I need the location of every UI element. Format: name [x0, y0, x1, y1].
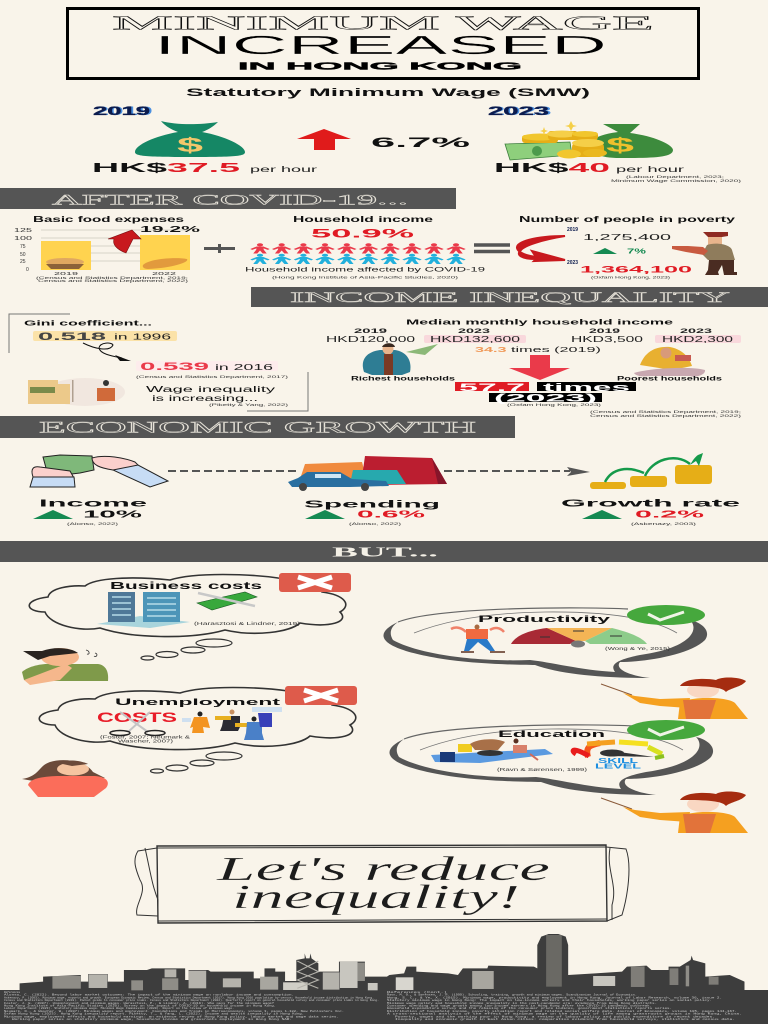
panel: gini coefficient: (Piketty & Yang, 2022) — [209, 403, 288, 407]
gini 1996 value — [33, 331, 177, 343]
panel: business costs thought: Business costs — [110, 581, 263, 592]
panel: 2019 wage: HK$ 37.5 — [92, 160, 240, 175]
text block: references — [4, 990, 742, 1021]
icon: green tick — [627, 720, 705, 740]
gini 1996 value: 0.518 — [38, 331, 106, 343]
panel: basic food expenses: 19.2% — [140, 225, 200, 234]
section heading: after COVID-19 — [0, 188, 456, 209]
panel: productivity speech — [383, 605, 748, 719]
panel: people in poverty: 7% — [627, 248, 647, 256]
icon: teacher pointing — [601, 677, 748, 719]
icon: office buildings — [97, 592, 190, 628]
icon: money bag 2019: $ — [177, 135, 203, 157]
panel: income growth — [30, 455, 168, 526]
skyline footer — [0, 934, 768, 1024]
panel: people in poverty — [517, 215, 737, 280]
bar chart: food expenses: 2019 — [54, 271, 79, 276]
icon: poor woman — [634, 347, 705, 377]
icon: money bag 2019 — [135, 121, 245, 157]
panel: 2019 wage: 2019 — [94, 104, 153, 118]
icon: people and coin stacks — [28, 378, 125, 406]
arrow: poverty growth — [517, 236, 565, 261]
gini 2016 value — [136, 361, 278, 373]
text block: references: Alonso, C. (2022). Beyond labor market outcomes: The impact of the minimum wage on nonlabor income and consumption. — [4, 993, 294, 997]
panel: 2023 wage: per hour — [616, 165, 685, 174]
panel: 2023 wage: 2023 — [490, 104, 552, 118]
text block: references: Working paper series on statutory minimum wage, household income and grassroots employment in Hong Kong SAR. — [12, 1017, 292, 1021]
section heading: economic growth: ECONOMIC GROWTH — [39, 420, 476, 436]
panel: unemployment thought: Wascher, 2007) — [118, 738, 174, 744]
panel: household income: Household income — [293, 215, 434, 224]
icon: red cross tag — [285, 686, 357, 705]
panel: 2019 wage — [92, 104, 318, 175]
panel: people in poverty: 2023 — [567, 260, 578, 266]
icon: thinking woman — [22, 760, 108, 797]
icon: green up triangle — [593, 248, 617, 254]
panel: people in poverty: 2019 — [567, 227, 578, 233]
panel: education speech: Education — [498, 729, 605, 740]
callout: 57.7 times: times — [543, 382, 630, 394]
icon row: households blue — [250, 254, 466, 264]
icon: money pile 2023 — [505, 121, 673, 160]
icon: bread basket — [46, 258, 84, 269]
icon: hands with money — [30, 455, 168, 487]
panel: median monthly household income: HKD120,000 — [326, 335, 416, 344]
panel: median monthly household income: Richest households — [351, 376, 456, 382]
icon: plus sign — [204, 244, 235, 253]
text block: references: Poverty, wages and the working poor in Hong Kong: a review of labour policy and public expenditure in recent decades. — [395, 1014, 715, 1018]
panel: 2019 wage: per hour — [250, 165, 318, 174]
text block: references: References — [4, 990, 21, 994]
panel: income growth: Income — [39, 498, 148, 510]
section heading: income inequality: INCOME INEQUALITY — [290, 290, 732, 306]
callout: 57.7 times: 57.7 — [459, 382, 525, 394]
panel: unemployment thought: Unemployment — [115, 697, 282, 708]
icon: shopping bags and car — [288, 456, 447, 491]
increase percentage: 6.7% — [371, 134, 472, 150]
icon: teacher pointing — [601, 791, 748, 833]
panel: household income: (Hong Kong Institute of Asia-Pacific Studies, 2020) — [272, 276, 458, 280]
panel: 2023 wage: 2023 — [488, 104, 550, 118]
icon: up triangle spending — [305, 510, 345, 519]
gauge: skill level: SKILL — [598, 758, 639, 765]
panel: spending growth — [288, 456, 447, 526]
call to action banner — [135, 845, 629, 923]
gini 2016 value: in 2016 — [215, 363, 274, 372]
speech bubble — [383, 608, 707, 678]
section heading: but — [0, 541, 768, 562]
gini 1996 value: in 1996 — [114, 332, 172, 342]
icon: up triangle growth — [582, 510, 622, 519]
panel: median monthly household income: 2023 — [458, 329, 492, 335]
panel: gini coefficient: (Census and Statistics Department, 2017) — [136, 375, 288, 379]
text block: references: Consumer spending and wage growth among low-income earners in Hong Kong after the COVID-19 pandemic outbreak. — [387, 1004, 652, 1008]
gauge: skill level — [573, 742, 664, 770]
text block: references: Inequality and economic growth in East Asian cities: comparative evidence from household surveys, statistics and census data. — [395, 1017, 735, 1021]
icon: thinking man — [22, 648, 108, 685]
icon: baguette — [143, 258, 187, 269]
gauge: skill level: LEVEL — [595, 764, 642, 770]
icon: green tick — [627, 605, 705, 625]
panel: growth rate: Growth rate — [561, 498, 741, 510]
icon: money pile 2023: $ — [606, 135, 634, 157]
thought bubbles — [141, 639, 232, 660]
text block: references: Minimum wage policy and household income inequality in the post-pandemic era: evidence from Hong Kong districts. — [387, 1001, 657, 1005]
gauge: productivity faces — [511, 628, 647, 648]
title block: IN HONG KONG — [238, 62, 523, 72]
panel: income growth: (Alonso, 2022) — [67, 522, 118, 526]
panel: median monthly household income: HKD2,300 — [662, 335, 734, 344]
panel: median monthly household income: Median monthly household income — [406, 318, 673, 326]
arrow: wage increase — [297, 129, 351, 150]
panel: business costs thought: (Harasztosi & Lindner, 2019) — [194, 621, 301, 626]
arrow: spending to growth — [444, 467, 590, 476]
panel: median monthly household income: 34.3 times (2019) — [475, 347, 601, 354]
panel: median monthly household income: HKD132,600 — [430, 335, 521, 344]
citation: wage sources: (Labour Department, 2023; — [626, 175, 724, 179]
text block: references: Household expenditure survey and the rebasing of the consumer price indices, government statistical reports series. — [387, 1006, 672, 1010]
panel: median monthly household income — [326, 318, 741, 418]
panel: basic food expenses: Census and Statistics Department, 2022) — [38, 279, 188, 283]
panel: median monthly household income: 2023 — [680, 329, 714, 335]
arrow: income to spending — [168, 470, 300, 472]
panel: people in poverty: 1,275,400 — [583, 233, 672, 242]
panel: household income: 50.9% — [311, 226, 415, 240]
panel: unemployment thought: (Foster, 2007; Neumark & — [100, 734, 190, 740]
section heading: economic growth — [0, 416, 515, 438]
title block — [68, 8, 698, 78]
bar chart: food expenses: 75 — [20, 244, 26, 250]
bar chart: food expenses — [14, 228, 190, 276]
arrow: squiggle to 2016 — [83, 343, 131, 361]
citation: wage sources — [611, 175, 741, 183]
text block: references: Wong, S. C., & Ye, X. (2015). Minimum wage, productivity and employment in Hong Kong. Journal of Labor Research, volume 36, issue 2. — [387, 995, 722, 999]
gini 2016 value: 0.539 — [140, 361, 209, 373]
icon: up triangle income — [33, 510, 73, 519]
text block: references: Labour Department (2023). Statutory minimum wage. Minimum Wage Commission (2020). Report on the review of minimum wage. — [4, 1006, 234, 1010]
panel: median monthly household income: 2019 — [354, 329, 389, 335]
arrow: food expense rise — [108, 230, 141, 253]
text block: references: References (Cont.) — [387, 990, 448, 994]
panel: household income — [245, 215, 486, 280]
panel: 2023 wage: HK$ 40 — [494, 160, 610, 175]
panel: basic food expenses — [14, 215, 200, 283]
panel: spending growth: 0.6% — [357, 510, 425, 520]
text block: references: Askenazy, P. (2003). Minimum wage, exports and growth. European Economic Review. Census and Statistics Department (2017). Hong Kong 2016 population by-census: Household income distribution in Hong Kong. — [4, 995, 374, 999]
panel: productivity speech: Productivity — [478, 614, 612, 625]
bar chart: food expenses: 2022 — [152, 271, 177, 276]
citation: wage sources: Minimum Wage Commission, 2020) — [611, 179, 741, 183]
icon: red cross tag — [279, 573, 351, 592]
subtitle: statutory minimum wage: Statutory Minimum Wage (SMW) — [186, 87, 591, 99]
panel: gini coefficient: is increasing... — [152, 394, 258, 403]
text block: references: Distribution of household income, poverty situation report and related social welfare data. Journal of Economics, volume 105, pages 144-167. — [387, 1009, 737, 1013]
panel: household income: Household income affected by COVID-19 — [245, 268, 486, 274]
panel: education speech: (Ravn & Sørensen, 1999) — [497, 767, 588, 772]
title block: INCREASED — [154, 30, 607, 60]
icon row: affected households red — [250, 243, 466, 254]
call to action banner: inequality! — [232, 879, 520, 916]
panel: education speech — [389, 720, 748, 833]
text block: references: A cross-sectional analysis of the effect of minimum wage on the quality of life among grassroots groups in Hong Kong, China. — [387, 1012, 742, 1016]
thought cloud — [29, 574, 346, 637]
bar chart: food expenses: 25 — [20, 259, 26, 265]
bar chart: food expenses: 0 — [26, 267, 29, 273]
thought cloud — [39, 688, 356, 750]
hand drawn frame — [135, 845, 629, 923]
text block: references: Census and Statistics Department (2019). Pocket guide to consumer price index. Census and Statistics Department (2022). Quarterly report on general household survey and consumer price index in Hong Kong. — [4, 998, 379, 1002]
icon: money and scissors — [197, 592, 257, 610]
panel: growth rate — [561, 453, 741, 526]
panel: median monthly household income: Census and Statistics Department, 2022) — [590, 414, 741, 418]
icon: construction worker — [451, 624, 505, 652]
speech bubble — [389, 725, 713, 795]
section heading: after COVID-19: AFTER COVID-19... — [52, 192, 408, 208]
text block: references: Hong Kong Institute of Asia-Pacific Studies (2020). Survey on the impact of COVID-19 on household income in Hong Kong. — [4, 1004, 276, 1008]
text block: references: Neumark, D., & Wascher, W. (2007). Minimum wages and employment. Foundations and Trends in Microeconomics, volume 3, pages 1-182, Now Publishers Inc. — [4, 1009, 344, 1013]
thought bubbles — [150, 752, 242, 773]
panel: people in poverty: 1,364,100 — [580, 264, 692, 274]
bar chart: food expenses: 50 — [20, 252, 26, 258]
panel: gini coefficient: Gini coefficient... — [24, 318, 152, 328]
text block: references: Statutory minimum wage in Hong Kong: The impact on low-income workers and their households, working paper series on social policy. — [387, 998, 712, 1002]
section heading: but: BUT... — [332, 546, 438, 560]
panel: gini coefficient — [9, 314, 308, 411]
panel: median monthly household income: HKD3,500 — [571, 335, 644, 344]
panel: 2019 wage: 2019 — [93, 104, 151, 118]
panel: gini coefficient: Wage inequality — [146, 385, 275, 394]
icon: book with students — [431, 738, 553, 763]
icon: costs with scissors — [97, 709, 177, 736]
panel: people in poverty: (Oxfam Hong Kong, 2023) — [591, 276, 670, 280]
icon: coin stacks with arrow — [590, 453, 712, 489]
callout: 57.7 times: (2023) — [494, 392, 598, 404]
icon: costs with scissors: COSTS — [97, 709, 177, 725]
icon: man with bowl — [672, 232, 737, 275]
panel: unemployment thought — [22, 686, 357, 797]
bar chart: food expenses: 100 — [14, 236, 32, 242]
bar chart: food expenses: 125 — [14, 228, 32, 234]
panel: growth rate: (Askenazy, 2003) — [631, 522, 696, 526]
panel: productivity speech: (Wong & Ye, 2015) — [605, 646, 671, 651]
text block: references: Ravn, M. O., & Sørensen, J. R. (1999). Schooling, training, growth and minimum wages. Scandinavian Journal of Economics. — [387, 993, 637, 997]
panel: basic food expenses: Basic food expenses — [33, 215, 185, 224]
text block: references: Oxfam Hong Kong (2023). Hong Kong inequality report. Piketty, T., & Yang, L. (2022). Income and wealth inequality in Hong Kong. — [4, 1012, 304, 1016]
panel: 2023 wage — [488, 104, 685, 175]
callout: 57.7 times — [455, 382, 636, 404]
panel: median monthly household income: Poorest households — [617, 376, 723, 382]
text block: references: Foster, J. E. (2007). Unemployment and minimum wages. Harasztosi, P., & Lindner, A. (2019). Who pays for the minimum wage? — [4, 1001, 275, 1005]
section heading: income inequality — [251, 287, 768, 307]
panel: median monthly household income: (Census and Statistics Department, 2019; — [590, 410, 741, 414]
icon: rich man — [363, 343, 438, 375]
title block: MINIMUM WAGE — [112, 12, 654, 34]
panel: growth rate: 0.2% — [635, 510, 704, 520]
panel: median monthly household income: (Oxfam Hong Kong, 2023) — [507, 403, 601, 407]
panel: spending growth: Spending — [304, 500, 440, 510]
panel: spending growth: (Alonso, 2022) — [349, 522, 401, 526]
arrow: to 57.7 times — [509, 355, 570, 380]
panel: income growth: 10% — [83, 510, 142, 520]
panel: median monthly household income: 2019 — [589, 329, 622, 335]
text block: references: Minimum wage, employment effects and household earnings: an evidence review of Hong Kong policy, labour market and wage data series. — [4, 1014, 339, 1018]
panel: basic food expenses: (Census and Statistics Department, 2019; — [36, 276, 188, 280]
call to action banner: Let's reduce — [215, 851, 550, 888]
icon: equals sign — [474, 245, 510, 252]
panel: people in poverty: Number of people in poverty — [519, 215, 736, 224]
icon: protesting workers — [182, 707, 282, 740]
panel: business costs thought — [22, 573, 351, 685]
